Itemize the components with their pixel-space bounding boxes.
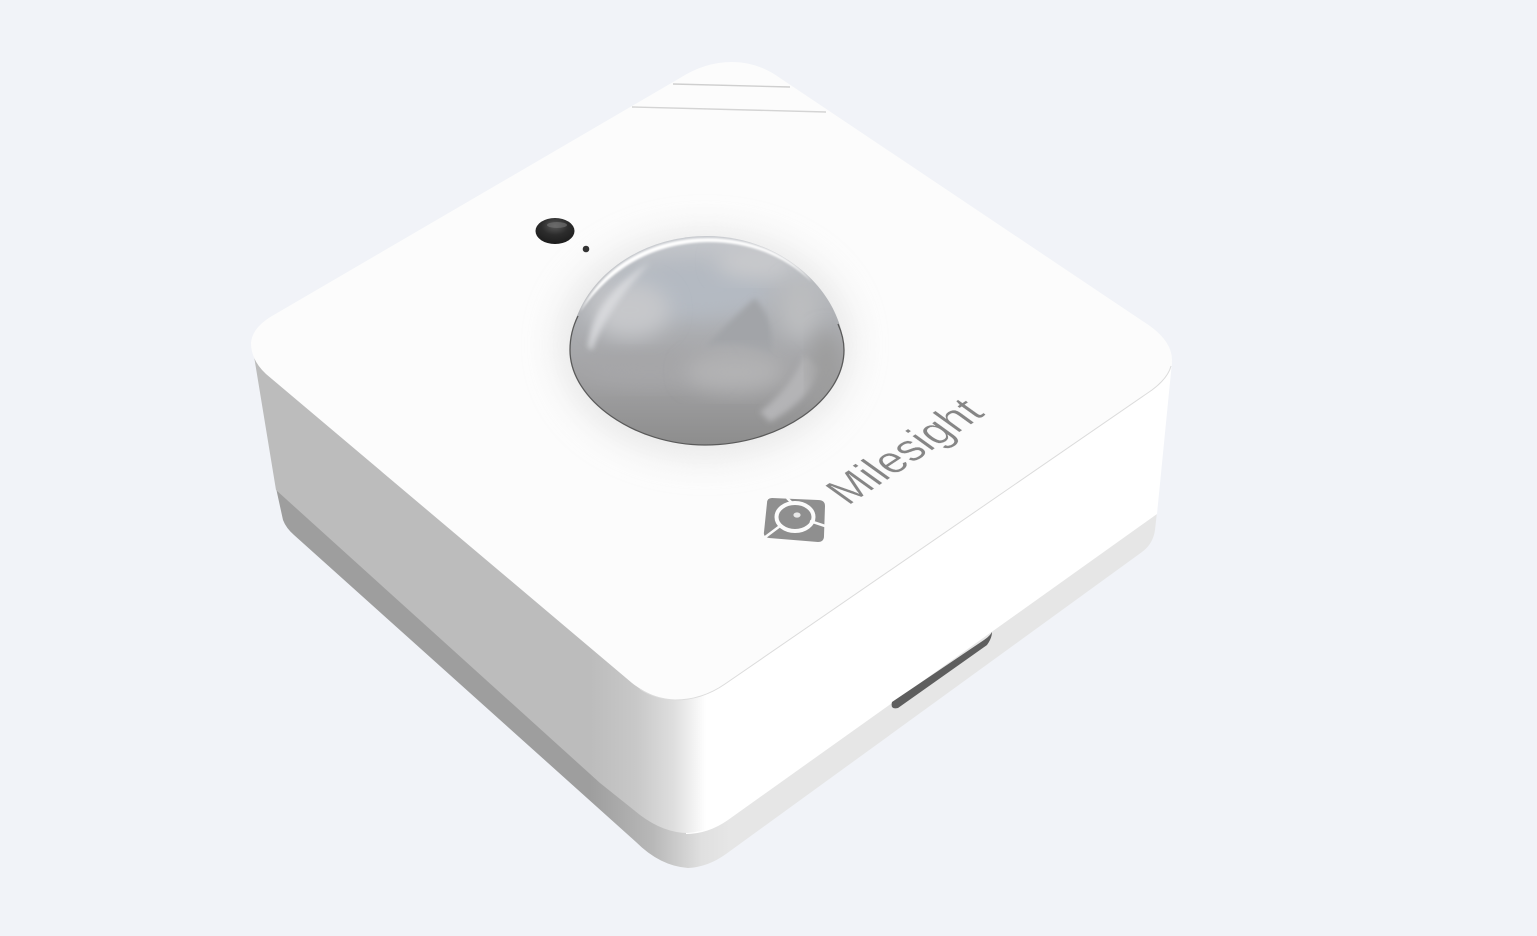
device body — [251, 62, 1172, 868]
right side wall — [686, 362, 1172, 834]
lens dark rim — [570, 316, 844, 445]
notch line upper — [673, 84, 790, 87]
product illustration: motion sensor — [251, 62, 1172, 868]
USB slot — [892, 632, 992, 708]
top edge seam — [640, 366, 1171, 700]
lens cloudy reflections — [589, 257, 836, 422]
indicator LED — [536, 218, 574, 244]
notch line lower — [632, 107, 826, 112]
Milesight logo wordmark: Milesight — [815, 391, 995, 512]
lens top rim highlight — [580, 238, 812, 312]
left side wall — [253, 350, 712, 833]
PIR dome lens — [570, 236, 844, 445]
soft shadow around dome — [559, 233, 851, 457]
Milesight logo icon — [764, 498, 825, 542]
lower housing band — [276, 488, 1157, 868]
top face — [251, 62, 1172, 700]
lens left highlight — [586, 266, 644, 350]
light sensor dot — [583, 246, 589, 252]
